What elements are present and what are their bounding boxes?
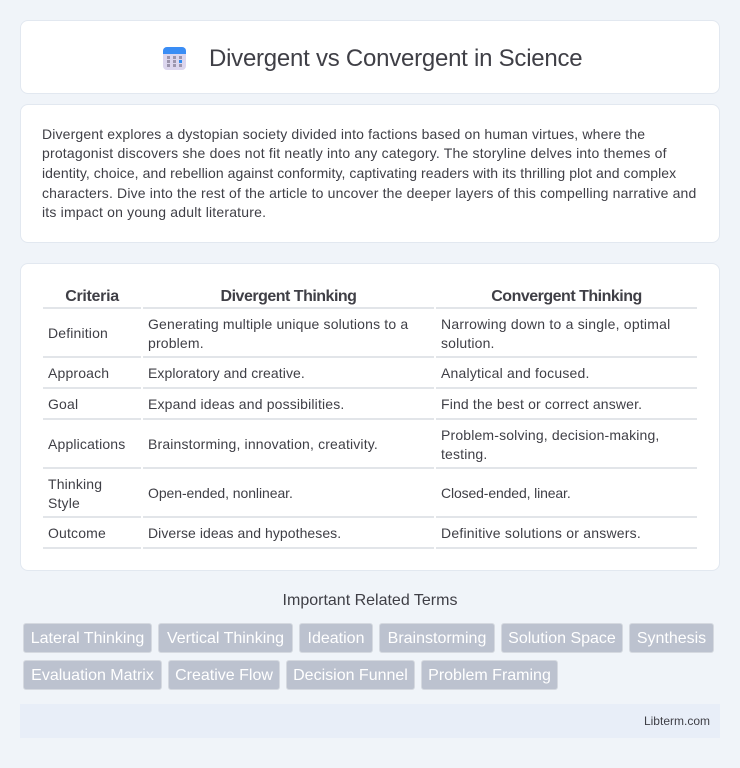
tag [299,623,373,653]
row: goal [48,396,642,412]
icon: calendar [163,47,186,70]
tag [629,623,714,653]
intro text: Divergent explores a dystopian society divided into factions based on human virtues, where the [42,126,645,142]
row: applications: Applications [48,436,125,452]
row: thinking style: Style [48,495,80,511]
table header: Criteria [65,288,119,305]
row: thinking style [48,476,571,511]
row: definition: solution. [441,335,495,351]
tag [168,660,280,690]
row: definition: Definition [48,325,108,341]
tag: Brainstorming [388,630,486,647]
panel: introduction [20,104,720,243]
row: applications: testing. [441,446,487,462]
intro text: identity, choice, and rebellion against conformity, captivating readers with its thrilling plot and complex [42,165,676,181]
row: outcome [48,525,641,541]
row: goal: Goal [48,396,78,412]
intro text [42,126,696,220]
tag [286,660,415,690]
table header: Divergent Thinking [221,288,356,305]
tag: Problem Framing [428,667,551,684]
row: applications: Brainstorming, innovation, creativity. [148,436,378,452]
intro text: its impact on young adult literature. [42,204,266,220]
tag [421,660,558,690]
intro text: protagonist discovers she does not fit neatly into any category. The storyline delves into themes of [42,145,667,161]
footer [20,704,720,738]
row: definition: Generating multiple unique solutions to a [148,316,408,332]
tag [23,660,162,690]
table header: Convergent Thinking [491,288,642,305]
tag [501,623,623,653]
panel: comparison table [20,263,720,571]
row: definition: Narrowing down to a single, optimal [441,316,670,332]
tag: Ideation [308,630,364,647]
tag [158,623,293,653]
row: approach: Approach [48,365,109,381]
header panel [20,20,720,94]
row: outcome: Definitive solutions or answers. [441,525,641,541]
tag: Solution Space [508,630,616,647]
row: applications [48,427,659,462]
table header [65,288,642,305]
row: approach: Analytical and focused. [441,365,590,381]
row: thinking style: Thinking [48,476,102,492]
tag: Vertical Thinking [167,630,284,647]
row: outcome: Diverse ideas and hypotheses. [148,525,341,541]
tag: Evaluation Matrix [31,667,154,684]
tag: Creative Flow [175,667,273,684]
tag [23,623,152,653]
row: definition: problem. [148,335,204,351]
row: applications: Problem-solving, decision-making, [441,427,659,443]
tag [379,623,495,653]
row: definition [48,316,670,351]
title: Divergent vs Convergent in Science [209,45,582,72]
row: thinking style: Closed-ended, linear. [441,485,571,501]
footer credit: Libterm.com [644,714,710,728]
related terms tags [23,623,714,690]
tag: Decision Funnel [293,667,408,684]
row: goal: Expand ideas and possibilities. [148,396,344,412]
tag: Lateral Thinking [31,630,144,647]
intro text: characters. Dive into the rest of the article to uncover the deeper layers of this compelling narrative and [42,185,696,201]
row: thinking style: Open-ended, nonlinear. [148,485,293,501]
tag: Synthesis [637,630,706,647]
row: approach: Exploratory and creative. [148,365,305,381]
row: approach [48,365,590,381]
row: goal: Find the best or correct answer. [441,396,642,412]
row: outcome: Outcome [48,525,106,541]
related terms heading: Important Related Terms [283,592,457,609]
